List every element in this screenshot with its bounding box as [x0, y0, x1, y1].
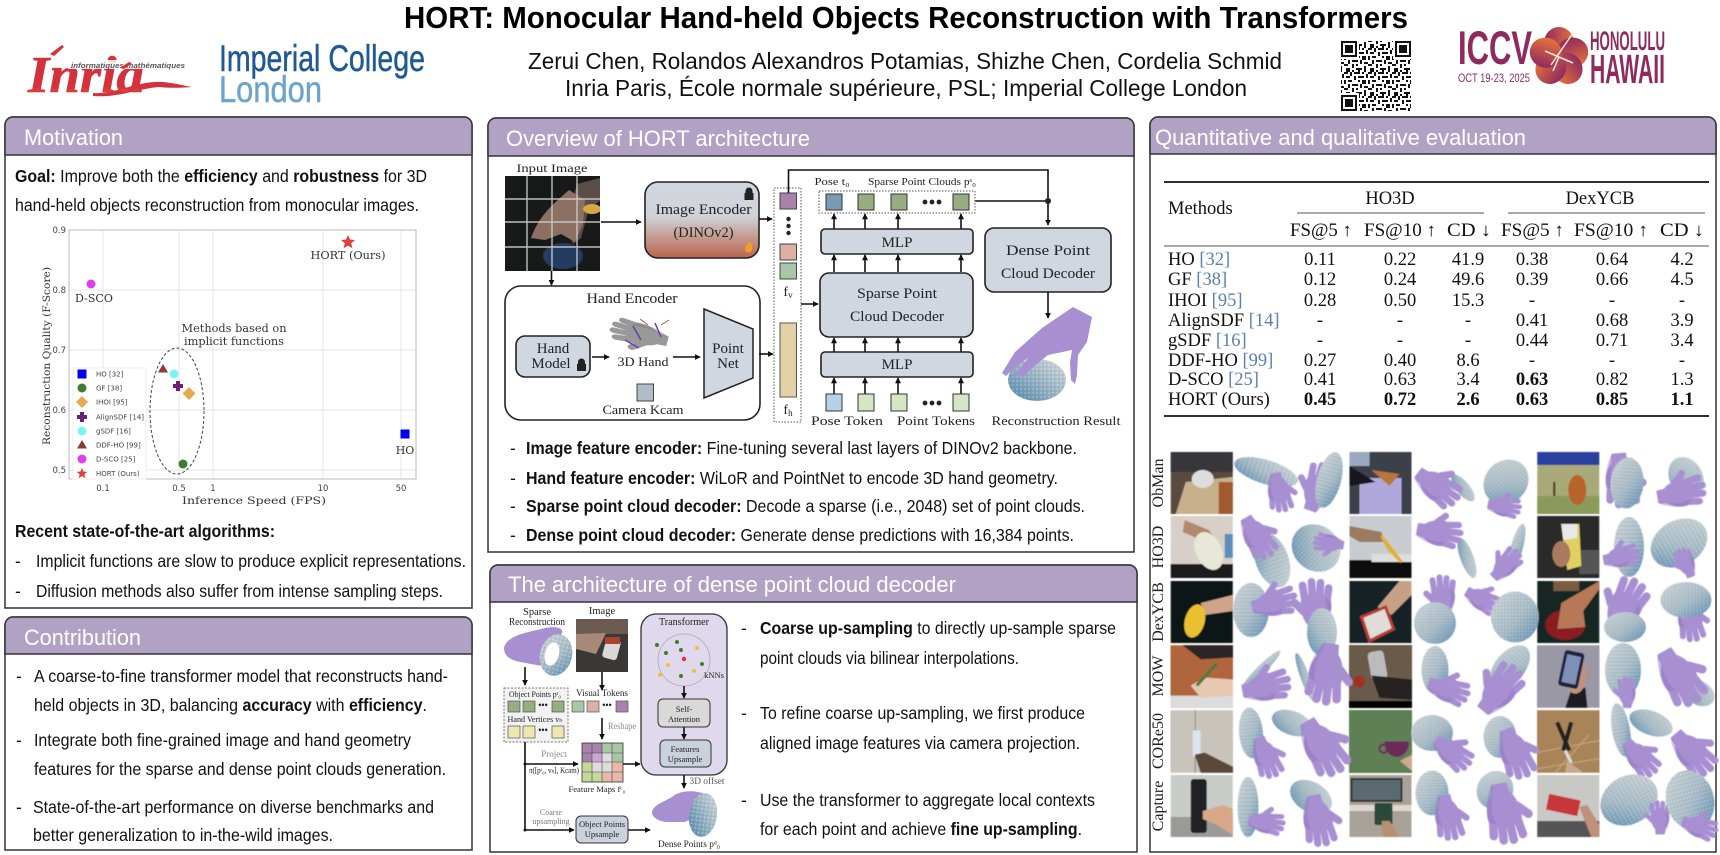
- row DDF-HO: -: [1679, 351, 1685, 371]
- chart: inference speed vs reconstruction quality: D-SCO: [75, 292, 113, 305]
- row GF: 49.6: [1452, 270, 1484, 290]
- row HO: 41.9: [1452, 250, 1484, 270]
- logo: Inria: [27, 45, 192, 104]
- logo: Inria: Inria: [27, 47, 144, 104]
- dense decoder diagram: Reshape: [608, 721, 636, 731]
- text block: overview bullets: [510, 438, 1085, 545]
- heading: dense decoder: The architecture of dense point cloud decoder: [508, 572, 956, 597]
- authors: Zerui Chen, Rolandos Alexandros Potamias, Shizhe Chen, Cordelia Schmid: [528, 48, 1282, 74]
- row D-SCO: 0.41: [1304, 370, 1336, 390]
- text block: contributions: [16, 666, 448, 845]
- self-attention: [658, 699, 710, 727]
- row gSDF: -: [1317, 331, 1323, 351]
- dense decoder diagram: π([pˢ₀, vₕ], Kcam): [529, 766, 579, 775]
- visual tokens: •••: [602, 700, 612, 710]
- row GF: 4.5: [1670, 270, 1694, 290]
- row DDF-HO: DDF-HO [99]: [1168, 351, 1273, 371]
- row labels: MOW: [1150, 655, 1167, 696]
- self-attention: Self-: [676, 704, 692, 714]
- row D-SCO: 0.82: [1596, 370, 1628, 390]
- panel: Overview of HORT architecture: [488, 118, 1134, 552]
- panel: Contribution: [5, 617, 472, 850]
- row IHOI: 15.3: [1452, 291, 1484, 311]
- text block: dense decoder bullets: Coarse up-sampling to directly up-sample sparse: [760, 618, 1116, 638]
- text block: recent algorithms: Diffusion methods also suffer from intense sampling steps.: [36, 581, 443, 601]
- row labels: ObMan: [1150, 459, 1167, 507]
- input image: [505, 176, 600, 271]
- text block: dense decoder bullets: point clouds via bilinear interpolations.: [760, 648, 1019, 668]
- text block: overview bullets: Dense point cloud decoder: Generate dense predictions with 16,384 points.: [526, 525, 1074, 545]
- logo: ICCV 2025: OCT 19-23, 2025: [1458, 71, 1530, 85]
- text block: overview bullets: -: [510, 525, 516, 545]
- reconstruction result: [992, 307, 1121, 428]
- results table: CD ↓: [1660, 221, 1704, 241]
- dense decoder diagram: Project: [541, 749, 567, 759]
- heading: evaluation: Quantitative and qualitative evaluation: [1155, 125, 1526, 150]
- text block: dense decoder bullets: -: [741, 703, 747, 723]
- row GF: GF [38]: [1168, 270, 1227, 290]
- text block: contributions: better generalization to in-the-wild images.: [33, 825, 333, 845]
- row AlignSDF: -: [1465, 311, 1471, 331]
- row GF: 0.24: [1384, 270, 1416, 290]
- row HORT: [1168, 390, 1694, 410]
- row HORT: 2.6: [1456, 390, 1480, 410]
- sparse point clouds row: Pose t₀: [814, 177, 850, 188]
- title: HORT: Monocular Hand-held Objects Reconstruction with Transformers: [404, 0, 1408, 35]
- text block: dense decoder bullets: Use the transformer to aggregate local contexts: [760, 790, 1095, 810]
- row AlignSDF: 0.68: [1596, 311, 1628, 331]
- results table: HO3D: [1365, 189, 1415, 209]
- visual tokens: Visual Tokens: [576, 689, 628, 699]
- features upsample: Upsample: [668, 754, 702, 764]
- row HO: 0.11: [1304, 250, 1336, 270]
- 3D hand: 3D Hand: [618, 354, 669, 369]
- text block: dense decoder bullets: [741, 618, 1116, 839]
- affiliations: Inria Paris, École normale supérieure, PSL; Imperial College London: [565, 75, 1247, 101]
- text block: contributions: -: [16, 730, 22, 750]
- heading: Motivation: Motivation: [24, 125, 123, 150]
- image encoder: Image Encoder: [656, 202, 752, 218]
- panel: Quantitative and qualitative evaluation: [1150, 117, 1720, 852]
- row gSDF: 3.4: [1670, 331, 1694, 351]
- legend: DDF-HO [99]: [96, 442, 141, 450]
- chart: inference speed vs reconstruction quality: Inference Speed (FPS): [182, 495, 326, 507]
- results table: DexYCB: [1566, 189, 1634, 209]
- row HO: 0.22: [1384, 250, 1416, 270]
- row HORT: 0.63: [1516, 390, 1548, 410]
- chart: inference speed vs reconstruction quality: Reconstruction Quality (F-Score): [41, 267, 53, 445]
- legend: GF [38]: [96, 384, 122, 392]
- dense decoder diagram: Sparse: [523, 607, 551, 618]
- row AlignSDF: AlignSDF [14]: [1168, 311, 1280, 331]
- text block: contributions: Integrate both fine-grained image and hand geometry: [34, 730, 411, 750]
- image encoder: [645, 182, 759, 258]
- row D-SCO: 0.63: [1516, 370, 1548, 390]
- qualitative gallery: [1150, 449, 1720, 846]
- chart: inference speed vs reconstruction quality: 50: [396, 484, 406, 494]
- input photo: [576, 619, 628, 672]
- icon: QR code: [1341, 41, 1411, 111]
- text block: recent algorithms: -: [15, 551, 21, 571]
- text block: goal: hand-held objects reconstruction from monocular images.: [15, 195, 419, 215]
- legend: IHOI [95]: [96, 398, 128, 406]
- row HO: HO [32]: [1168, 250, 1230, 270]
- row HORT: 0.45: [1304, 390, 1336, 410]
- chart: inference speed vs reconstruction quality: 10: [318, 484, 328, 494]
- sparse reconstruction render: [504, 627, 577, 679]
- 3D hand: [610, 317, 670, 369]
- row AlignSDF: 3.9: [1670, 311, 1694, 331]
- pointnet: Net: [717, 356, 740, 372]
- pointnet: [704, 309, 753, 398]
- feature column fv fh: [774, 188, 801, 422]
- row gSDF: 0.71: [1596, 331, 1628, 351]
- text block: overview bullets: -: [510, 496, 516, 516]
- logo: Imperial College London: London: [219, 69, 322, 110]
- self-attention: Attention: [668, 714, 701, 724]
- row IHOI: -: [1679, 291, 1685, 311]
- chart: inference speed vs reconstruction quality: 0.9: [52, 226, 66, 236]
- row HO: 4.2: [1670, 250, 1694, 270]
- results table: FS@5 ↑: [1290, 221, 1352, 241]
- dense point cloud decoder: [985, 228, 1111, 292]
- row DDF-HO: 8.6: [1456, 351, 1480, 371]
- text block: recent algorithms: -: [15, 581, 21, 601]
- chart: inference speed vs reconstruction quality: implicit functions: [184, 335, 284, 348]
- text block: dense decoder bullets: -: [741, 790, 747, 810]
- row AlignSDF: -: [1397, 311, 1403, 331]
- legend: HORT (Ours): [96, 470, 140, 478]
- MLP top: [821, 229, 973, 254]
- dense point cloud decoder: Dense Point: [1006, 243, 1091, 259]
- results table: FS@10 ↑: [1364, 221, 1436, 241]
- object points and hand vertices: Object Points pˢ₀: [509, 689, 561, 699]
- row IHOI: [1168, 291, 1685, 311]
- object points and hand vertices: •••: [538, 700, 548, 710]
- results table: Methods: [1168, 199, 1233, 219]
- sparse point cloud decoder: Sparse Point: [857, 286, 938, 302]
- row D-SCO: 3.4: [1456, 370, 1480, 390]
- row gSDF: [1168, 331, 1694, 351]
- row D-SCO: [1168, 370, 1694, 390]
- feature column fv fh: v: [788, 290, 793, 300]
- MLP bottom: [821, 352, 973, 377]
- input tokens: [811, 394, 975, 428]
- row HORT: 0.72: [1384, 390, 1416, 410]
- object points and hand vertices: Hand Vertices vₕ: [508, 714, 563, 724]
- row HO: 0.38: [1516, 250, 1548, 270]
- text block: contributions: A coarse-to-fine transformer model that reconstructs hand-: [34, 666, 448, 686]
- row DDF-HO: -: [1529, 351, 1535, 371]
- hand model: Hand: [537, 341, 570, 357]
- logo: ICCV 2025: [1458, 21, 1665, 92]
- chart: inference speed vs reconstruction quality: 0.7: [52, 346, 66, 356]
- heading: Overview: Overview of HORT architecture: [506, 126, 810, 151]
- logo: Inria: informatiques mathématiques: [71, 63, 185, 70]
- row DDF-HO: 0.40: [1384, 351, 1416, 371]
- row gSDF: -: [1465, 331, 1471, 351]
- results table: FS@5 ↑: [1501, 221, 1564, 241]
- row D-SCO: 1.3: [1670, 370, 1694, 390]
- chart: inference speed vs reconstruction quality: [41, 226, 416, 507]
- hand encoder: [505, 286, 760, 420]
- results table: CD ↓: [1447, 221, 1491, 241]
- row labels: [1150, 459, 1167, 831]
- row IHOI: 0.50: [1384, 291, 1416, 311]
- dense decoder diagram: 3D offset: [690, 776, 725, 786]
- chart: inference speed vs reconstruction quality: Methods based on: [182, 322, 286, 335]
- text block: overview bullets: -: [510, 438, 516, 458]
- row D-SCO: D-SCO [25]: [1168, 370, 1259, 390]
- text block: dense decoder bullets: aligned image features via camera projection.: [760, 733, 1080, 753]
- panel: Motivation: [5, 117, 472, 608]
- sparse point cloud decoder: Cloud Decoder: [850, 309, 944, 325]
- row gSDF: gSDF [16]: [1168, 331, 1247, 351]
- legend: D-SCO [25]: [96, 456, 136, 464]
- row GF: 0.39: [1516, 270, 1548, 290]
- text block: recent algorithms: [15, 521, 466, 601]
- row AlignSDF: 0.41: [1516, 311, 1548, 331]
- text block: goal: [15, 166, 427, 215]
- object points and hand vertices: •••: [538, 725, 548, 735]
- legend: HO [32]: [96, 370, 124, 378]
- text block: contributions: -: [16, 797, 22, 817]
- results table: [1164, 182, 1709, 416]
- feature column fv fh: h: [788, 408, 793, 418]
- chart: inference speed vs reconstruction quality: 0.5: [52, 466, 66, 476]
- text block: contributions: features for the sparse and dense point clouds generation.: [34, 759, 446, 779]
- MLP top: MLP: [882, 235, 912, 251]
- photo thumbnails: [1170, 452, 1600, 837]
- chart: inference speed vs reconstruction quality: 0.6: [52, 406, 66, 416]
- dense decoder diagram: [504, 606, 727, 849]
- text block: goal: Goal: Improve both the efficiency and robustness for 3D: [15, 166, 427, 186]
- row IHOI: IHOI [95]: [1168, 291, 1242, 311]
- logo: ICCV 2025: ICCV: [1458, 21, 1532, 74]
- row HO: [1168, 250, 1694, 270]
- row AlignSDF: [1168, 311, 1694, 331]
- feature column fv fh: f: [783, 285, 788, 300]
- logo: Imperial College London: Imperial College: [219, 38, 425, 79]
- chart: inference speed vs reconstruction quality: HORT (Ours): [310, 249, 386, 262]
- object points and hand vertices: [504, 688, 568, 742]
- row labels: DexYCB: [1150, 582, 1167, 642]
- legend: AlignSDF [14]: [96, 414, 144, 422]
- input tokens: Point Tokens: [897, 413, 975, 428]
- dense decoder diagram: Coarse: [540, 808, 563, 817]
- text block: overview bullets: Image feature encoder: Fine-tuning several last layers of DINOv2 backbone.: [526, 438, 1077, 458]
- text block: recent algorithms: Implicit functions are slow to produce explicit representations.: [36, 551, 466, 571]
- sparse point cloud decoder: [820, 273, 973, 337]
- row gSDF: 0.44: [1516, 331, 1548, 351]
- row IHOI: -: [1529, 291, 1535, 311]
- object points upsample: [576, 816, 628, 843]
- panel: dense point cloud decoder: [490, 565, 1137, 852]
- feature maps: Feature Maps fᶜ₀: [568, 784, 626, 794]
- row GF: 0.66: [1596, 270, 1628, 290]
- dense points render: Dense Points pᵈ₀: [658, 839, 720, 849]
- hand model: [516, 336, 590, 377]
- logo: Imperial College London: [219, 38, 425, 110]
- transformer: kNNs: [704, 670, 724, 680]
- feature column fv fh: f: [783, 403, 788, 418]
- visual tokens: [572, 689, 628, 712]
- text block: overview bullets: -: [510, 468, 516, 488]
- architecture diagram: Input Image: [516, 161, 588, 175]
- row DDF-HO: [1168, 351, 1685, 371]
- 3D reconstruction renders: [1231, 449, 1720, 846]
- row DDF-HO: -: [1609, 351, 1615, 371]
- dense decoder diagram: upsampling: [532, 817, 570, 826]
- row HORT: HORT (Ours): [1168, 390, 1270, 410]
- text block: contributions: State-of-the-art performance on diverse benchmarks and: [33, 797, 434, 817]
- text block: dense decoder bullets: for each point and achieve fine up-sampling.: [760, 819, 1082, 839]
- object points upsample: Upsample: [585, 829, 619, 839]
- camera: Camera Kcam: [602, 403, 684, 417]
- row HORT: 1.1: [1670, 390, 1694, 410]
- features upsample: [660, 740, 711, 767]
- row IHOI: 0.28: [1304, 291, 1336, 311]
- transformer: [641, 614, 727, 775]
- text block: dense decoder bullets: -: [741, 618, 747, 638]
- row AlignSDF: -: [1317, 311, 1323, 331]
- row labels: CORe50: [1150, 713, 1167, 769]
- feature maps: [568, 743, 626, 794]
- pointnet: Point: [712, 341, 745, 357]
- legend: [73, 368, 146, 479]
- hand encoder: Hand Encoder: [586, 291, 678, 307]
- input tokens: Pose Token: [811, 413, 884, 428]
- chart: inference speed vs reconstruction quality: 0.1: [96, 484, 110, 494]
- sparse point clouds row: Sparse Point Clouds pˢ₀: [868, 177, 976, 188]
- row DDF-HO: 0.27: [1304, 351, 1336, 371]
- MLP bottom: MLP: [882, 357, 912, 373]
- chart: inference speed vs reconstruction quality: 0.5: [172, 484, 186, 494]
- camera: [602, 384, 684, 417]
- row D-SCO: 0.63: [1384, 370, 1416, 390]
- image encoder: (DINOv2): [674, 225, 734, 241]
- text block: overview bullets: Sparse point cloud decoder: Decode a sparse (i.e., 2048) set of point clouds.: [526, 496, 1085, 516]
- text block: contributions: -: [16, 666, 22, 686]
- results table: FS@10 ↑: [1574, 221, 1648, 241]
- hand model: Model: [531, 356, 571, 372]
- dense decoder diagram: Image: [589, 606, 615, 617]
- text block: contributions: held objects in 3D, balancing accuracy with efficiency.: [34, 695, 427, 715]
- dense points render: [652, 791, 720, 849]
- row HO: 0.64: [1596, 250, 1628, 270]
- row HORT: 0.85: [1596, 390, 1628, 410]
- architecture diagram: [505, 161, 1121, 428]
- row labels: Capture: [1150, 781, 1167, 831]
- row labels: HO3D: [1150, 526, 1167, 568]
- row gSDF: -: [1397, 331, 1403, 351]
- chart: inference speed vs reconstruction quality: HO: [396, 444, 414, 457]
- row GF: 0.12: [1304, 270, 1336, 290]
- text block: overview bullets: Hand feature encoder: WiLoR and PointNet to encode 3D hand geometry.: [526, 468, 1058, 488]
- transformer: Transformer: [659, 617, 710, 628]
- row IHOI: -: [1609, 291, 1615, 311]
- dense decoder diagram: Reconstruction: [509, 617, 566, 628]
- dense point cloud decoder: Cloud Decoder: [1001, 266, 1095, 282]
- row GF: [1168, 270, 1694, 290]
- sparse point clouds row: [814, 177, 976, 213]
- features upsample: Features: [671, 744, 699, 754]
- reconstruction result: Reconstruction Result: [992, 413, 1121, 428]
- heading: Contribution: Contribution: [24, 625, 141, 650]
- chart: inference speed vs reconstruction quality: 0.8: [52, 286, 66, 296]
- chart: inference speed vs reconstruction quality: 1: [210, 484, 216, 494]
- legend: gSDF [16]: [96, 428, 131, 436]
- object points upsample: Object Points: [579, 819, 625, 829]
- text block: dense decoder bullets: To refine coarse up-sampling, we first produce: [760, 703, 1085, 723]
- text block: recent algorithms: Recent state-of-the-art algorithms:: [15, 521, 275, 541]
